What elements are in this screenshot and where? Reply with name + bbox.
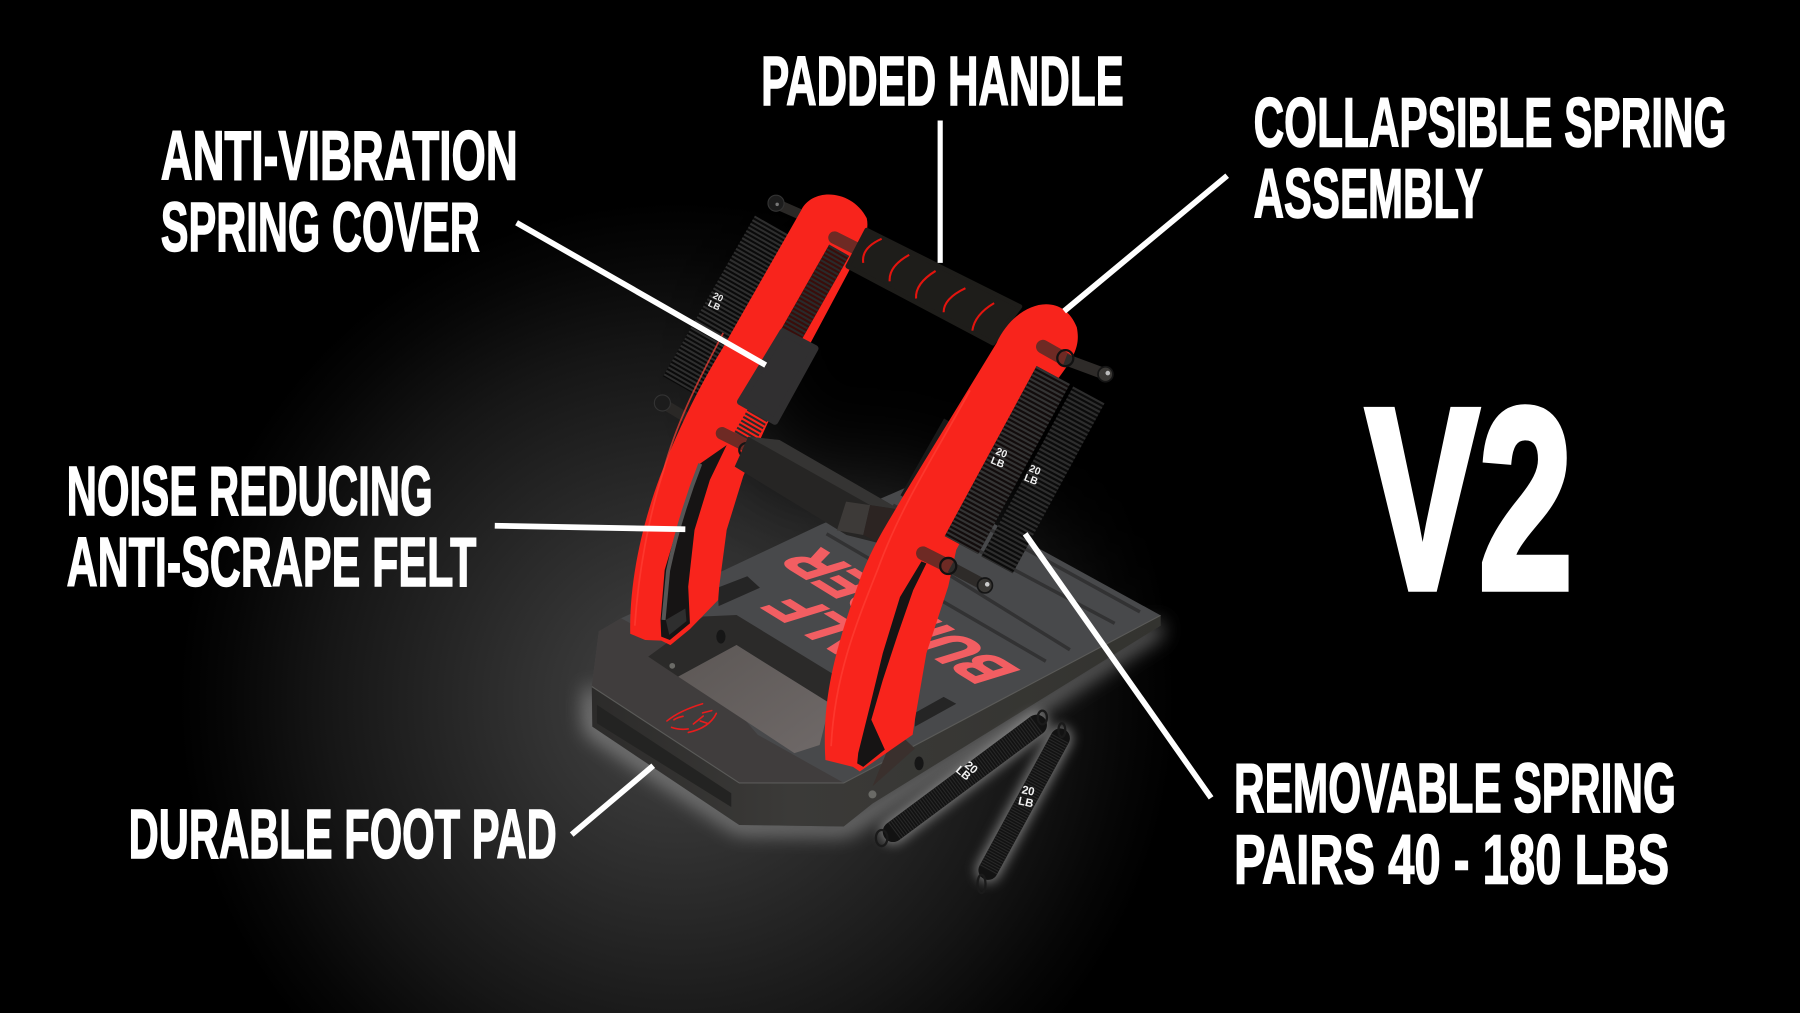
loose springs: 20 bbox=[1021, 784, 1036, 799]
leader: spring cover bbox=[517, 223, 766, 365]
base halo glow bbox=[592, 627, 1161, 828]
pins left bbox=[654, 195, 804, 419]
plate lettering: calf builder: CALF bbox=[747, 589, 939, 686]
rear spring left bbox=[680, 225, 771, 386]
loose springs: 20 bbox=[962, 759, 980, 777]
label: removable spring pairs bbox=[1234, 749, 1676, 898]
plate lettering: calf builder: BUILDER bbox=[764, 543, 1036, 689]
window recess and pedestals bbox=[648, 576, 956, 798]
crossbar block bbox=[735, 420, 947, 543]
collapsible spring pair bbox=[961, 375, 1089, 565]
rear spring left: LB bbox=[707, 298, 722, 313]
left red arch bbox=[630, 195, 867, 645]
title: V2: V2 bbox=[1366, 356, 1573, 643]
pins right bbox=[923, 347, 1113, 593]
label: anti-vibration spring cover bbox=[161, 117, 518, 266]
right red arch bbox=[825, 304, 1078, 771]
product: calf builder machine bbox=[592, 195, 1161, 893]
collapsible spring pair: LB bbox=[1022, 473, 1039, 488]
leader: padded handle bbox=[938, 121, 942, 263]
anti-vibration sleeve bbox=[740, 332, 815, 421]
inner spring left bbox=[743, 250, 839, 441]
label: anti-vibration spring cover: SPRING COVER bbox=[161, 188, 480, 266]
leader: felt bbox=[495, 526, 685, 529]
rear spring left: 20 bbox=[711, 290, 725, 304]
collapsible spring pair: LB bbox=[989, 455, 1006, 471]
label: noise reducing anti-scrape felt: NOISE REDUCING bbox=[67, 452, 433, 530]
loose springs: LB bbox=[953, 764, 972, 783]
leader: foot pad bbox=[572, 766, 653, 835]
label: durable foot pad: DURABLE FOOT PAD bbox=[129, 795, 557, 873]
collapsible spring pair: 20 bbox=[1027, 463, 1042, 478]
mid pin left bbox=[722, 433, 753, 457]
loose springs: LB bbox=[1017, 795, 1034, 810]
label: noise reducing anti-scrape felt: ANTI-SCRAPE FELT bbox=[67, 523, 477, 601]
label: padded handle: PADDED HANDLE bbox=[761, 42, 1124, 120]
label: collapsible spring assembly bbox=[1254, 83, 1727, 233]
leader: removable spring bbox=[1025, 534, 1211, 798]
loose springs bbox=[876, 711, 1065, 893]
collapsible spring pair: 20 bbox=[994, 446, 1009, 461]
leader: collapsible spring bbox=[1064, 176, 1227, 311]
plate grooves bbox=[827, 494, 1140, 661]
label: anti-vibration spring cover: ANTI-VIBRATION bbox=[161, 117, 518, 195]
icon: bull logo bbox=[667, 704, 716, 732]
padded handle bbox=[835, 230, 1020, 343]
foot plate and base bbox=[592, 482, 1161, 827]
label: noise reducing anti-scrape felt bbox=[67, 452, 477, 601]
label: collapsible spring assembly: ASSEMBLY bbox=[1254, 155, 1483, 233]
